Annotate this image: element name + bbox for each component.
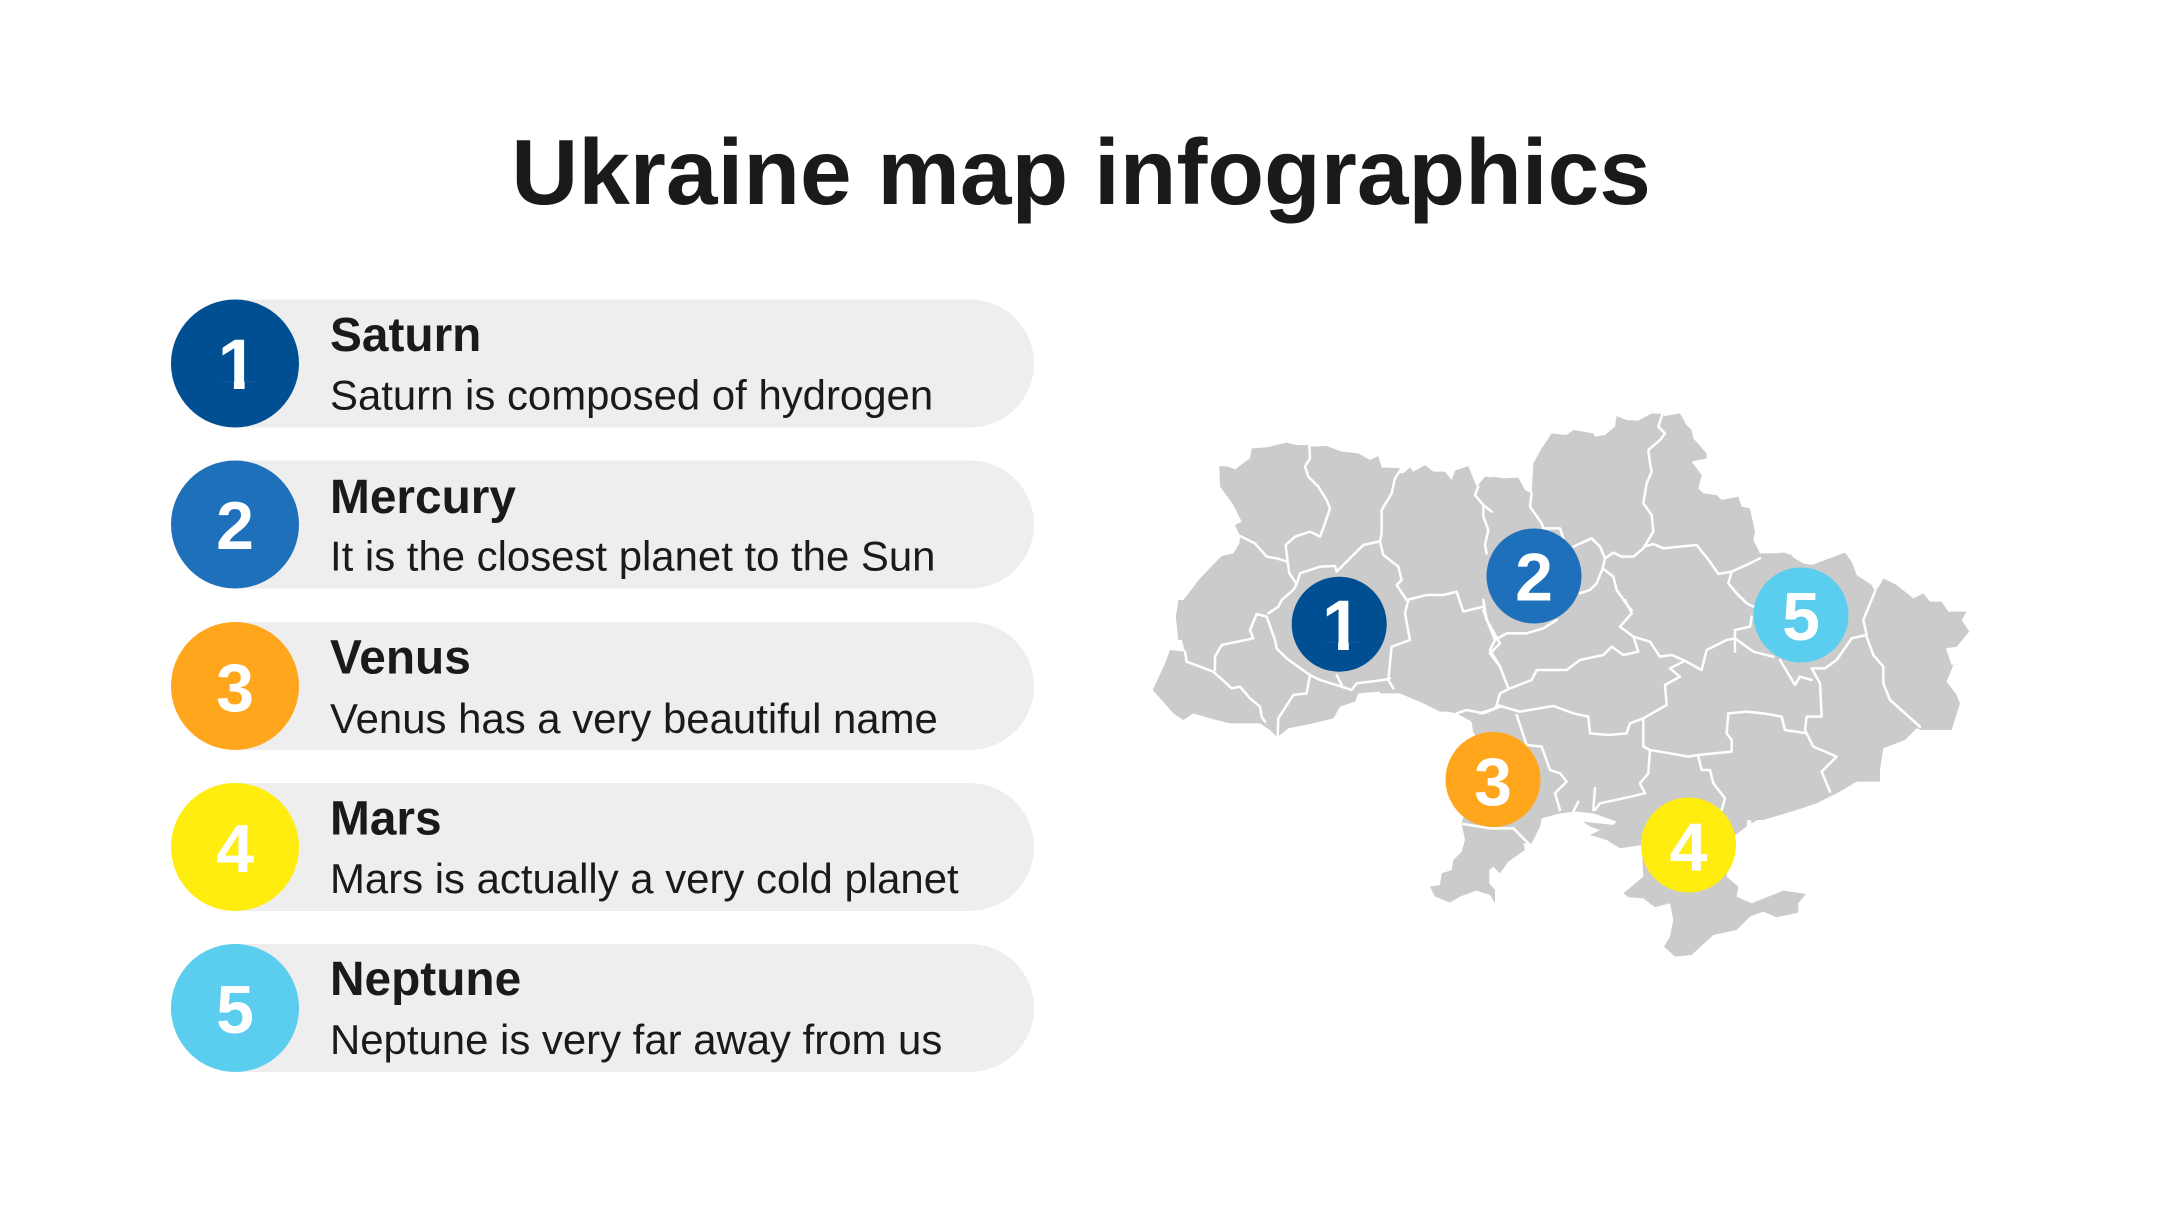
map marker 4: 4	[1670, 810, 1708, 886]
list item 2: Mercury: It is the closest planet to the Sun	[330, 532, 935, 580]
list item 4: Mars: Mars	[330, 792, 442, 846]
list item 5: Neptune: Neptune is very far away from us	[330, 1016, 942, 1063]
list item 2: Mercury	[171, 460, 1034, 588]
panel: list of planets	[171, 300, 1034, 1072]
list item 4: Mars: 4	[216, 811, 254, 887]
list item 4: Mars: Mars is actually a very cold planet	[330, 855, 959, 902]
list item 5: Neptune	[171, 944, 1034, 1072]
list item 3: Venus	[171, 622, 1034, 750]
list item 5: Neptune: 5	[216, 972, 254, 1048]
list item 2: Mercury: Mercury	[330, 471, 516, 524]
map marker 3: 3	[1474, 744, 1512, 820]
list item 1: Saturn: 1	[218, 326, 257, 405]
list item 1: Saturn: Saturn is composed of hydrogen	[330, 372, 933, 418]
list item 3: Venus: Venus	[330, 632, 471, 684]
list item 1: Saturn	[171, 300, 1034, 428]
map marker 2: 2	[1515, 540, 1553, 616]
map marker 5: 5	[1782, 579, 1820, 655]
map of Ukraine	[1153, 413, 1969, 957]
map marker 2	[1486, 528, 1582, 624]
list item 4: Mars	[171, 783, 1034, 911]
map marker 1: 1	[1322, 587, 1361, 666]
list item 3: Venus: 3	[216, 650, 254, 726]
map marker 5	[1754, 568, 1848, 662]
map marker 1	[1292, 577, 1387, 672]
map marker 3	[1446, 732, 1540, 827]
list item 5: Neptune: Neptune	[330, 953, 521, 1006]
list item 2: Mercury: 2	[216, 488, 254, 564]
list item 3: Venus: Venus has a very beautiful name	[330, 695, 938, 742]
title: Ukraine map infographics	[511, 120, 1651, 224]
map marker 4	[1641, 798, 1736, 892]
list item 1: Saturn: Saturn	[330, 309, 481, 362]
